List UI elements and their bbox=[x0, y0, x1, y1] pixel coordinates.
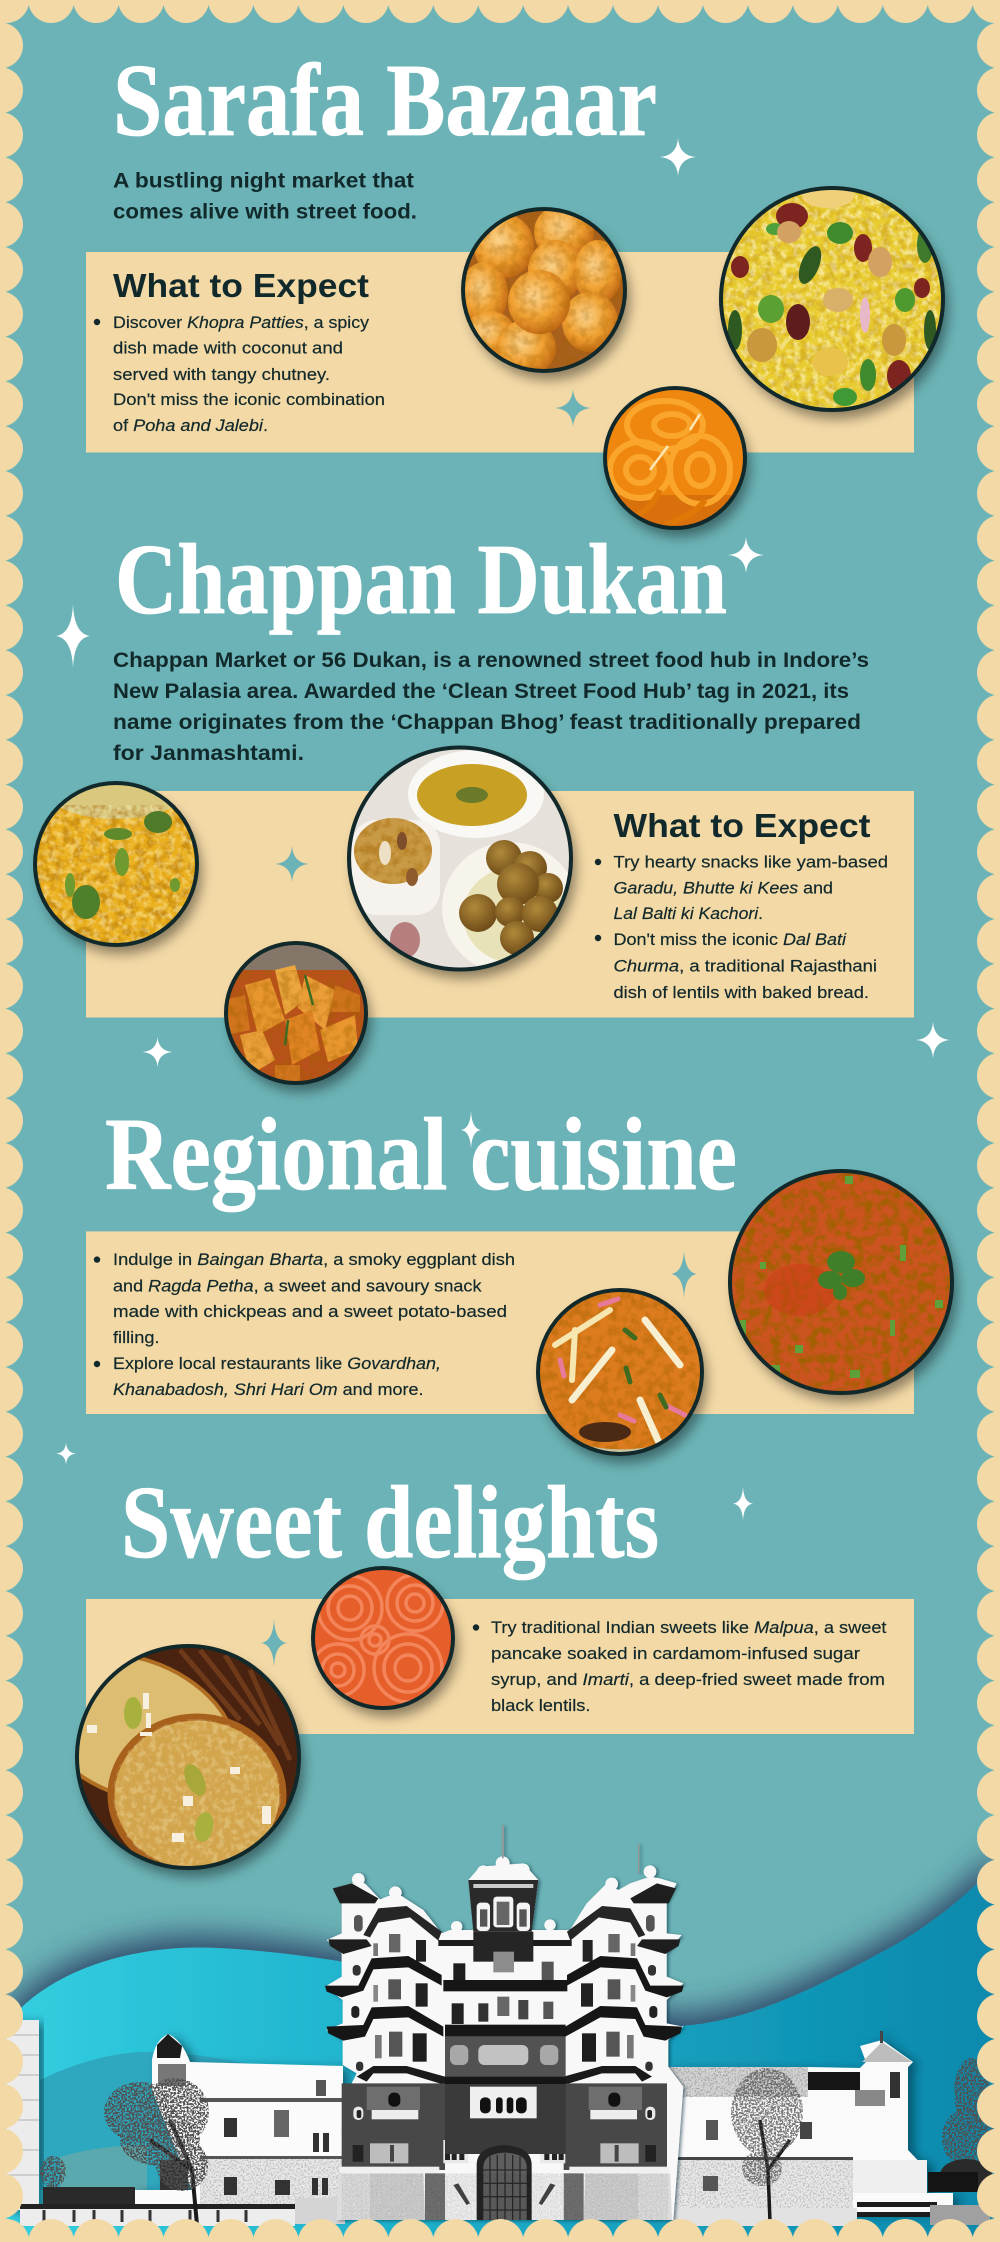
bullet list: Indulge in Baingan Bharta , a smoky eggplant dish bbox=[113, 1250, 515, 1269]
bullet list bbox=[473, 1618, 887, 1715]
photo: yellow snack bbox=[34, 771, 199, 947]
right tree bbox=[731, 2068, 803, 2222]
palace right half detail bbox=[530, 1883, 684, 2220]
subtitle: A bustling night market that bbox=[113, 170, 414, 192]
bullet list: black lentils. bbox=[491, 1696, 590, 1715]
bullet list: dish of lentils with baked bread. bbox=[614, 983, 869, 1002]
panel: regional dishes bbox=[86, 1231, 914, 1414]
illustration: palace skyline with blue waves bbox=[0, 1825, 1000, 2242]
intro paragraph bbox=[113, 649, 869, 765]
palace left half detail bbox=[325, 1883, 478, 2220]
title: Regional cuisine: Regional cuisine bbox=[105, 1097, 737, 1212]
palace stone grain bbox=[342, 2173, 668, 2220]
intro paragraph: for Janmashtami. bbox=[113, 742, 304, 765]
photo: poha bbox=[720, 184, 945, 411]
palace silhouette bbox=[325, 1825, 683, 2220]
title: Sweet delights: Sweet delights bbox=[121, 1465, 659, 1580]
bullet list: made with chickpeas and a sweet potato-based bbox=[113, 1302, 507, 1321]
bullet list: Khanabadosh, Shri Hari Om and more. bbox=[113, 1380, 424, 1399]
subtitle: comes alive with street food. bbox=[113, 200, 417, 224]
bullet list: syrup, and Imarti, a deep-fried sweet made from bbox=[491, 1670, 885, 1689]
photo: malpua bbox=[75, 1644, 311, 1884]
photo: jalebi bbox=[600, 385, 750, 535]
icon: teal sparkle bbox=[555, 389, 591, 427]
bullet list: Garadu, Bhutte ki Kees and bbox=[614, 878, 833, 898]
bullet list: Discover Khopra Patties , a spicy bbox=[113, 313, 370, 332]
icon: white sparkle bbox=[916, 1022, 950, 1058]
bullet list: Lal Balti ki Kachori . bbox=[614, 904, 763, 923]
panel: what to expect bbox=[86, 791, 914, 1018]
photo: imarti bbox=[310, 1565, 456, 1711]
icon: white sparkle bbox=[461, 1111, 481, 1149]
photo: baingan bharta bbox=[728, 1170, 954, 1396]
icon: white sparkle bbox=[56, 1443, 76, 1465]
section: Sarafa Bazaar bbox=[86, 43, 945, 535]
photo: potatoes bbox=[224, 942, 369, 1087]
section: Chappan Dukan bbox=[34, 523, 950, 1087]
bullet list: Churma , a traditional Rajasthani bbox=[614, 956, 877, 975]
section: Sweet delights bbox=[13, 1465, 914, 1873]
light hills bbox=[40, 2052, 257, 2195]
bullet list: Try hearty snacks like yam-based bbox=[614, 852, 888, 872]
bullet list: Explore local restaurants like Govardhan, bbox=[113, 1354, 441, 1373]
blue wave background bbox=[0, 1860, 1000, 2242]
palace centre detail bbox=[438, 1880, 572, 2220]
bullet list: and Ragda Petha , a sweet and savoury snack bbox=[113, 1276, 482, 1295]
bullet list bbox=[595, 852, 888, 1002]
icon: teal sparkle bbox=[275, 846, 309, 882]
bullet list: Don't miss the iconic combination bbox=[113, 390, 385, 409]
intro paragraph: Chappan Market or 56 Dukan, is a renowned street food hub in Indore’s bbox=[113, 649, 869, 672]
icon: white sparkle bbox=[733, 1487, 753, 1521]
bullet list: of Poha and Jalebi . bbox=[113, 416, 268, 435]
bullet list bbox=[94, 1250, 515, 1399]
right wing bbox=[668, 2031, 953, 2212]
panel heading: What to Expect bbox=[614, 807, 870, 844]
bullet list: filling. bbox=[113, 1328, 160, 1347]
bullet list bbox=[94, 313, 385, 435]
title: Sarafa Bazaar: Sarafa Bazaar bbox=[113, 43, 657, 158]
icon: teal sparkle bbox=[261, 1619, 287, 1667]
main palace bbox=[325, 1825, 684, 2220]
subtitle bbox=[113, 170, 417, 224]
icon: teal sparkle bbox=[671, 1250, 697, 1298]
title: Chappan Dukan: Chappan Dukan bbox=[115, 523, 727, 635]
left wing bbox=[133, 2034, 343, 2212]
icon: white sparkle bbox=[728, 537, 764, 573]
photo: dal bati churma bbox=[348, 746, 578, 974]
section: Regional cuisine bbox=[56, 1097, 954, 1465]
far right tree bbox=[928, 2058, 994, 2192]
bullet list: Try traditional Indian sweets like Malpua, a sweet bbox=[491, 1618, 887, 1637]
bullet list: dish made with coconut and bbox=[113, 338, 343, 358]
photo: ragda petha bbox=[536, 1288, 706, 1460]
intro paragraph: New Palasia area. Awarded the ‘Clean Street Food Hub’ tag in 2021, its bbox=[113, 680, 849, 703]
bullet list: pancake soaked in cardamom-infused sugar bbox=[491, 1644, 860, 1663]
icon: white sparkle bbox=[56, 604, 90, 668]
icon: white sparkle bbox=[660, 138, 696, 176]
bullet list: served with tangy chutney. bbox=[113, 365, 330, 384]
panel: sweets bbox=[86, 1599, 914, 1734]
intro paragraph: name originates from the ‘Chappan Bhog’ feast traditionally prepared bbox=[113, 711, 861, 734]
left white tower block bbox=[6, 2020, 39, 2210]
left hedge and plinth bbox=[20, 2156, 345, 2226]
left tree bbox=[104, 2078, 209, 2225]
right plinth bbox=[673, 2202, 990, 2226]
panel: what to expect bbox=[86, 252, 914, 452]
bullet list: Don't miss the iconic Dal Bati bbox=[614, 930, 847, 949]
panel heading: What to Expect bbox=[113, 267, 369, 304]
icon: white sparkle bbox=[142, 1037, 172, 1067]
photo: khopra patties bbox=[460, 204, 630, 376]
